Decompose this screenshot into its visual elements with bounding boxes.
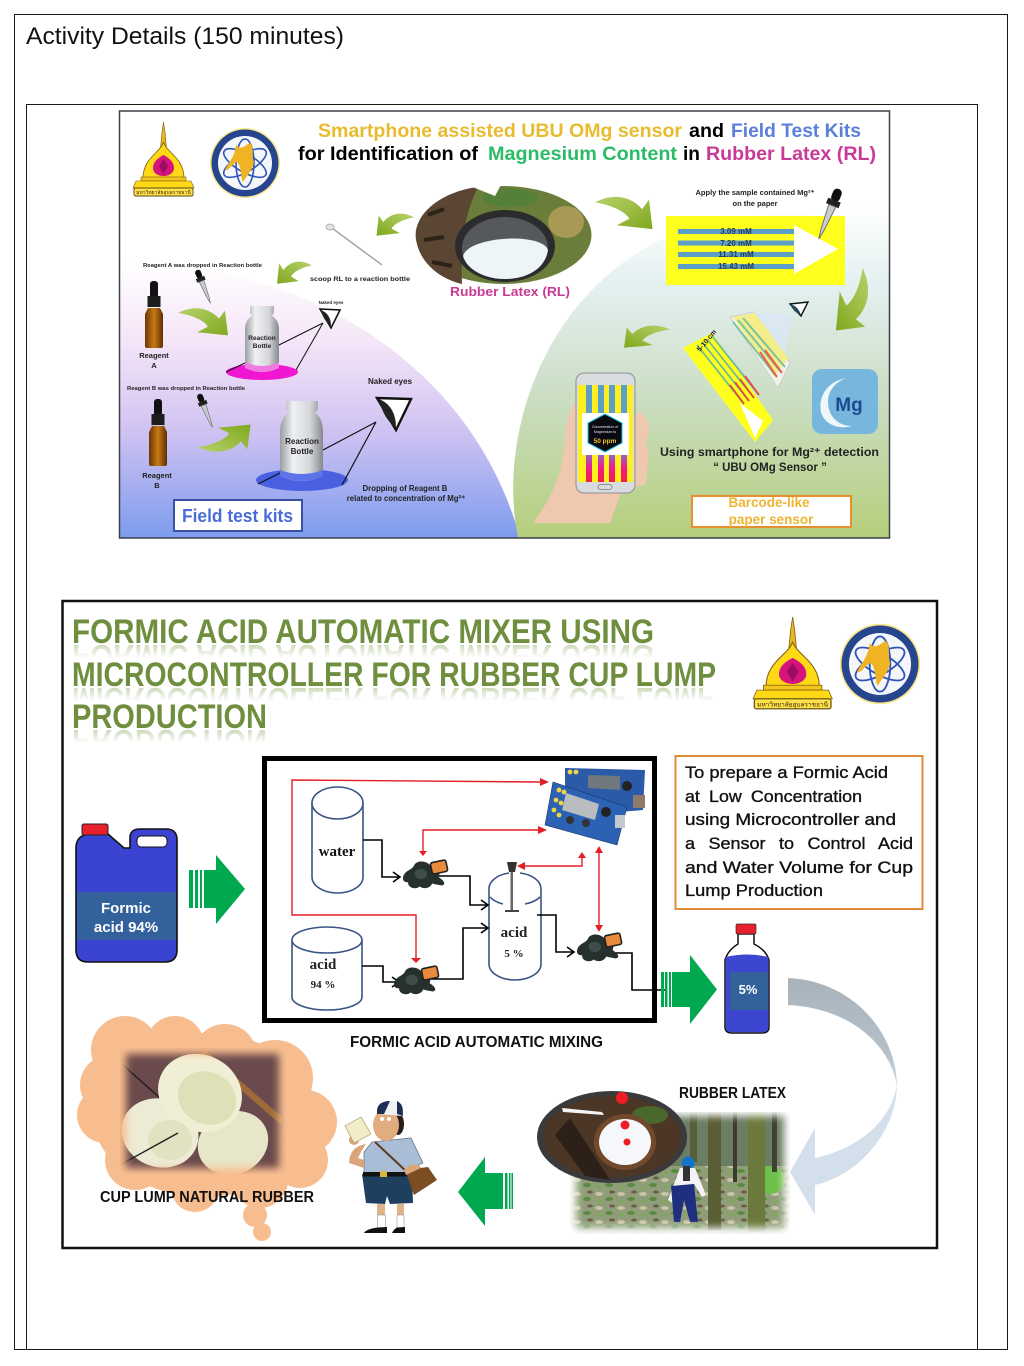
icon: 5% bottle: 5% [739,982,758,997]
label: acid 5 [501,925,528,960]
photo: cup lumps [120,1048,285,1174]
panel title: Smartphone assisted UBU OMg sensor [318,120,682,142]
card: barcode paper sensor: 3.09 mM [720,227,752,236]
label: naked eyes B: Naked eyes [368,377,413,386]
text box: purpose: a Sensor to Control Acid [685,834,913,853]
arrow: reagent A to bottle [178,308,228,335]
arrow: into mixer [189,855,245,924]
illustration: phone in hand: 50 ppm [594,438,617,445]
tank: acid 5% with stirrer [489,873,541,980]
icon: reaction bottle A: Reaction [248,335,276,342]
label: using smartphone [660,447,879,474]
label: reagent A: Reagent [139,351,169,360]
stirrer [505,862,519,912]
icon: pump water [403,860,448,888]
label: reagent A step: Reagent A was dropped in Reaction bottle [143,263,262,269]
panel title with reflection: MICROCONTROLLER FOR RUBBER CUP LUMP [72,680,716,718]
label: using smartphone: Using smartphone for Mg²⁺ detection [660,447,879,459]
card: barcode paper sensor [666,216,845,285]
text box: purpose: at Low Concentration [685,787,862,806]
icon: reaction bottle A [226,306,298,380]
photo: rubber latex cup [416,183,592,284]
panel title with reflection: PRODUCTION [72,698,267,736]
icon: reaction bottle B: Reaction [285,437,319,446]
panel title: and [689,120,724,142]
tank: water [312,787,363,893]
text box: purpose: Lump Production [685,881,823,900]
icon: postman [345,1101,437,1233]
label: reagent B: B [154,481,160,490]
logo: university crest: มหาวิทยาลัยอุบลราชธานี [757,700,829,708]
logo: university crest: มหาวิทยาลัยอุบลราชธานี [136,189,191,196]
logo: science faculty seal [210,128,280,198]
sight lines A [226,323,323,372]
illustration: phone in hand: Magnesium is [594,430,616,434]
icon: dropper B [195,392,217,429]
icon: reagent bottle B [149,399,167,466]
icon: dropper A [193,268,215,305]
red control lines [292,780,599,958]
illustration: strip sensor and phone [683,302,808,442]
label: reagent A [139,351,169,370]
page heading: Activity Details (150 minutes) [26,23,344,50]
icon: eye A [320,309,340,328]
label: using smartphone: “ UBU OMg Sensor ” [713,462,827,474]
label box: barcode-like paper sensor: paper sensor [729,512,814,527]
logo: science faculty seal [840,624,920,704]
icon: reaction bottle B [256,401,348,491]
icon: formic acid jerry can: Formic [101,900,151,917]
illustration: phone in hand [533,373,649,523]
illustration: phone in hand: Concentration of [592,425,618,429]
icon: 5% bottle [725,924,769,1033]
cloud shape [77,1016,337,1241]
logo: university crest [753,617,832,709]
label: dropping of reagent B: Dropping of Reagent B [363,484,448,493]
label: scoop step: scoop RL to a reaction bottle [310,276,410,283]
panel title with reflection: MICROCONTROLLER FOR RUBBER CUP LUMP [72,656,716,694]
label: acid 94: 94 % [311,979,335,991]
arrow: latex to paper sensor [595,197,652,229]
label box: field test kits [174,500,302,531]
label: acid 94: acid [310,957,337,973]
arrow: curved flow to rubber latex [788,978,897,1215]
icon: sample dropper [813,186,845,242]
card: barcode paper sensor: 11.31 mM [718,250,754,259]
worker [668,1156,706,1222]
label: apply the sample [696,188,815,208]
text box: purpose: To prepare a Formic Acid [685,763,888,782]
label: rubber latex: Rubber Latex (RL) [450,284,570,299]
panel title with reflection [72,613,716,760]
label: apply the sample: Apply the sample contained Mg²⁺ [696,188,815,197]
arrow: to 5% bottle [661,955,717,1024]
label: apply the sample: on the paper [732,199,778,208]
panel title with reflection: FORMIC ACID AUTOMATIC MIXER USING [72,637,654,675]
icon: reaction bottle A: Bottle [253,343,272,350]
label: cup lump: CUP LUMP NATURAL RUBBER [100,1189,314,1206]
label: reagent B: Reagent [142,471,172,480]
panel title with reflection: PRODUCTION [72,722,267,760]
icon: pump output [577,933,622,961]
icon: reagent bottle A [145,281,163,348]
icon: pump acid [394,966,439,994]
panel title: for Identification of [298,143,479,165]
arrow: latex to scoop [376,214,414,236]
label box: field test kits: Field test kits [182,506,293,526]
panel: smartphone sensor and field test kits [120,111,890,538]
panel title with reflection: FORMIC ACID AUTOMATIC MIXER USING [72,613,654,651]
label: acid 5: 5 % [504,948,524,960]
label: dropping of reagent B [347,484,465,503]
label box: barcode-like paper sensor [692,495,851,527]
panel title: Field Test Kits [731,120,861,142]
icon: reaction bottle B: Bottle [291,447,314,456]
label: dropping of reagent B: related to concentration of Mg²⁺ [347,494,465,503]
icon: formic acid jerry can: acid 94% [94,919,158,936]
label: reagent B [142,471,172,490]
black flow lines [362,840,665,990]
icon: scoop [326,224,382,265]
photo: rubber plantation [570,1112,790,1234]
arrow: scoop to reaction bottle [277,262,312,284]
panel title: Rubber Latex (RL) [706,143,876,165]
panel title [298,120,876,165]
arrow: to buyer [458,1157,513,1226]
panel title: in [683,143,700,165]
icon: formic acid jerry can [76,824,177,962]
thought cloud: cup lump [77,1016,337,1241]
panel: formic acid automatic mixer [62,601,937,1248]
illustration: strip sensor and phone: 5-10 cm [696,329,718,353]
arrow: paper to smartphone step [836,268,868,330]
logo: university crest [133,122,194,196]
diagram: automatic mixing [264,758,665,1020]
label: naked eyes A: Naked eyes [319,300,344,305]
label: water: water [319,844,356,860]
arrow: reagent B to bottle [198,425,250,452]
arrow: strip to phone [624,326,670,348]
panel title: Magnesium Content [488,143,678,165]
label: rubber latex: RUBBER LATEX [679,1085,786,1102]
label: acid 94 [310,957,337,991]
red arrowheads [411,778,603,963]
field test kits background [120,262,520,538]
icon: Mg sensor app: Mg [835,395,863,416]
text box: purpose [676,756,922,909]
text box: purpose: using Microcontroller and [685,810,896,829]
photo inset: latex cup [537,1091,687,1183]
label: reagent A: A [151,361,157,370]
tank: acid 94% [292,927,362,1010]
icon: eye B [377,398,411,430]
label: reagent B step: Reagent B was dropped in Reaction bottle [127,386,245,392]
barcode sensor background [513,205,889,538]
label: acid 5: acid [501,925,528,941]
icon: Mg sensor app [812,369,878,434]
label: automatic mixing: FORMIC ACID AUTOMATIC MIXING [350,1034,603,1051]
icon: microcontroller boards [545,768,645,845]
label box: barcode-like paper sensor: Barcode-like [728,495,810,510]
text box: purpose: and Water Volume for Cup [685,858,913,877]
sight lines B [258,422,376,485]
card: barcode paper sensor: 15.43 mM [718,262,754,271]
card: barcode paper sensor: 7.20 mM [720,239,752,248]
